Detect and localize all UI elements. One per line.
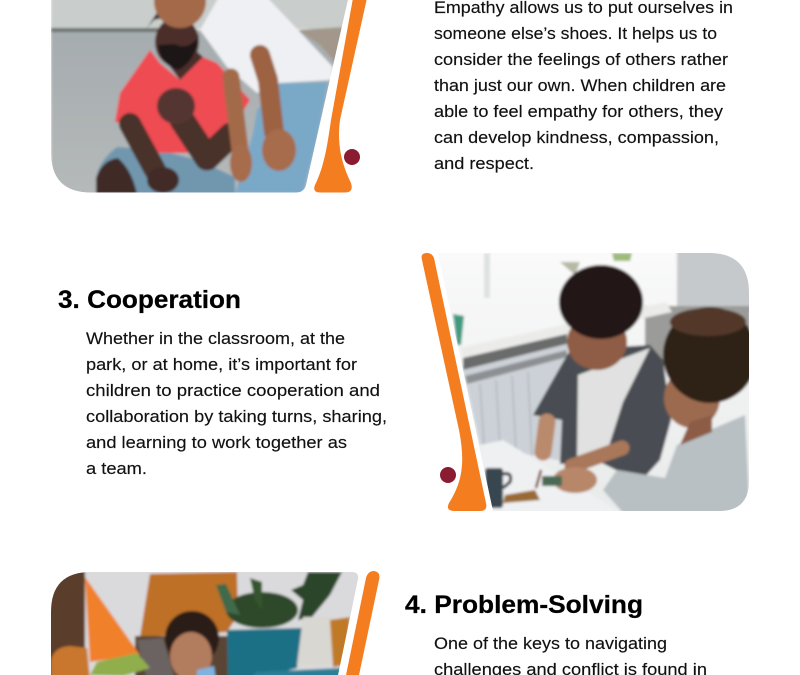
empathy text	[434, 0, 733, 173]
problem-solving text	[434, 634, 707, 675]
cooperation text: Whether in the classroom, at the	[86, 329, 345, 348]
cooperation text: children to practice cooperation and	[86, 381, 380, 400]
section 4: problem-solving	[48, 570, 707, 675]
photo: girl in a living room	[48, 570, 363, 675]
maroon dot	[344, 149, 360, 165]
section 3: cooperation	[58, 250, 757, 515]
section 2: empathy	[51, 0, 733, 195]
cooperation text: park, or at home, it’s important for	[86, 355, 357, 374]
empathy text: consider the feelings of others rather	[434, 50, 728, 69]
orange swoosh	[422, 253, 486, 511]
heading: 3. Cooperation	[58, 286, 241, 314]
plant right cluster	[291, 572, 342, 620]
orange swoosh	[314, 0, 367, 192]
cooperation text: collaboration by taking turns, sharing,	[86, 407, 387, 426]
cooperation text: a team.	[86, 459, 147, 478]
cooperation text	[86, 329, 387, 478]
empathy text: than just our own. When children are	[434, 76, 726, 95]
empathy text: can develop kindness, compassion,	[434, 128, 719, 147]
empathy text: and respect.	[434, 154, 534, 173]
plant left cluster	[226, 592, 298, 628]
empathy text: someone else’s shoes. It helps us to	[434, 24, 717, 43]
problem-solving text: One of the keys to navigating	[434, 634, 667, 653]
cooperation text: and learning to work together as	[86, 433, 347, 452]
orange swoosh	[345, 571, 379, 675]
photo: father and son by the water	[51, 0, 351, 195]
photo: two children at a table	[448, 253, 749, 511]
maroon dot	[440, 467, 456, 483]
heading: 4. Problem-Solving	[405, 591, 643, 619]
empathy text: able to feel empathy for others, they	[434, 102, 724, 121]
